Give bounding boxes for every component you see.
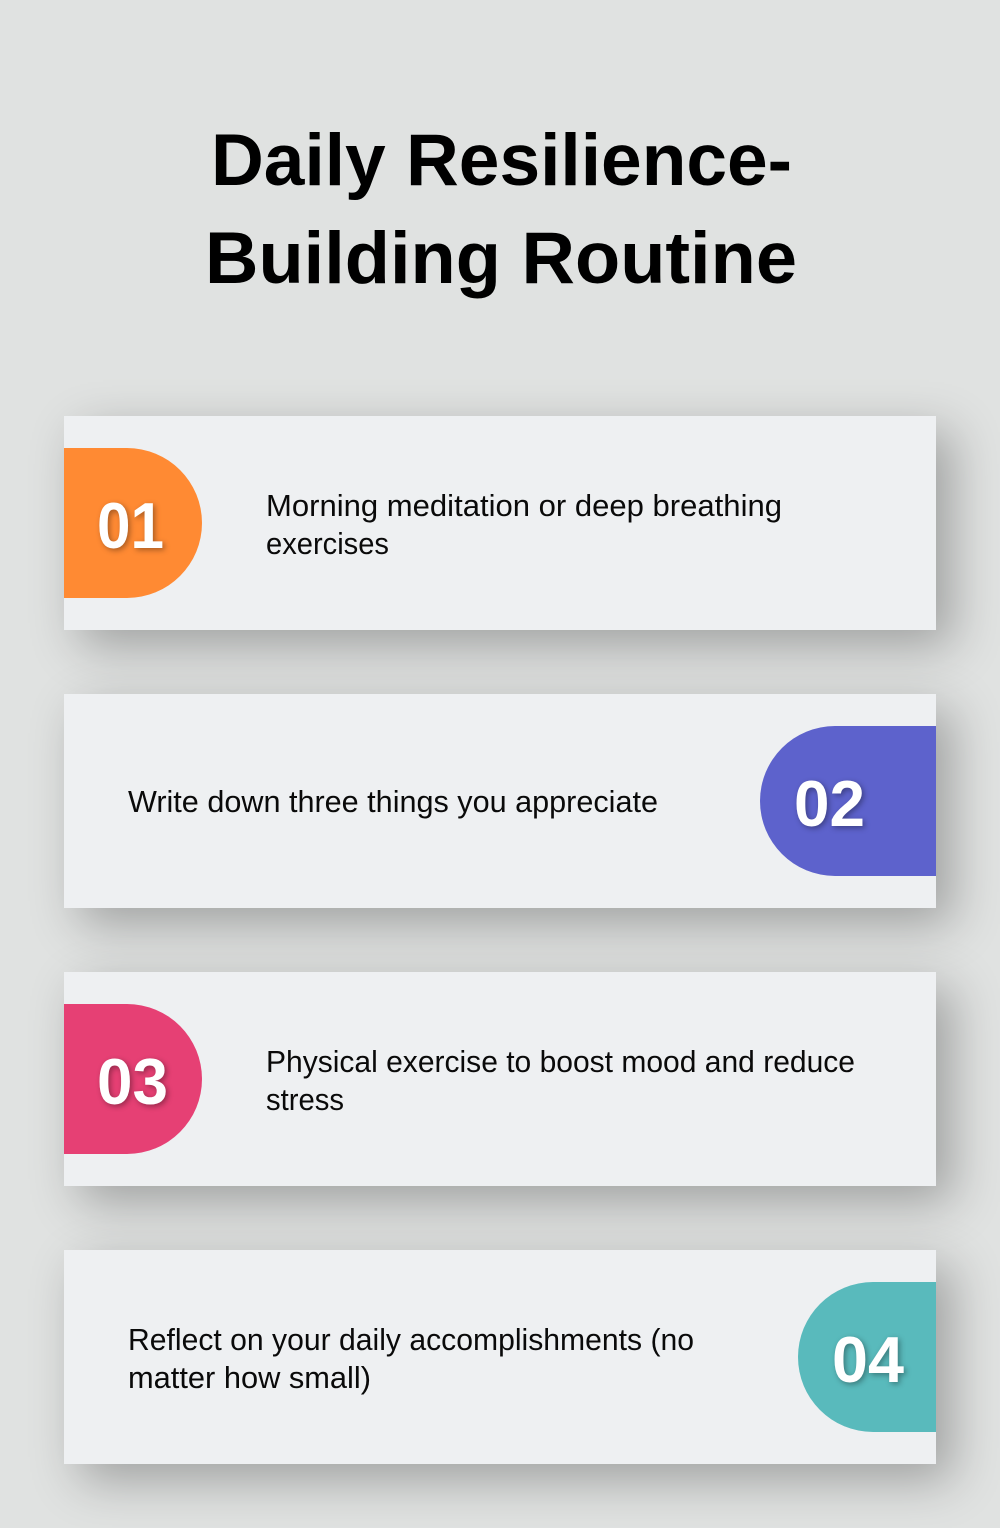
panel: step 01 (64, 416, 936, 630)
step 01 text: exercises (266, 527, 389, 561)
title: Daily Resilience- (211, 120, 792, 201)
panel: step 03 (64, 972, 936, 1186)
step 03 text: stress (266, 1083, 344, 1117)
badge: 04: 04 (832, 1323, 904, 1396)
step 03 text (266, 1045, 855, 1117)
panel: step 02 (64, 694, 936, 908)
step 04 text (128, 1323, 694, 1395)
badge: 02: 02 (794, 767, 865, 840)
step 03 text: Physical exercise to boost mood and reduce (266, 1045, 855, 1079)
step 01 text: Morning meditation or deep breathing (266, 489, 782, 523)
badge: 03 (64, 1004, 202, 1154)
title: Building Routine (205, 218, 797, 299)
title (205, 120, 797, 299)
step 04 text: matter how small) (128, 1361, 371, 1395)
step 04 text: Reflect on your daily accomplishments (no (128, 1323, 694, 1357)
badge: 01: 01 (97, 489, 164, 562)
step 01 text (266, 489, 782, 561)
step 02 text: Write down three things you appreciate (128, 785, 658, 819)
badge: 01 (64, 448, 202, 598)
badge: 02 (760, 726, 936, 876)
badge: 03: 03 (97, 1045, 168, 1118)
panel: step 04 (64, 1250, 936, 1464)
badge: 04 (798, 1282, 936, 1432)
